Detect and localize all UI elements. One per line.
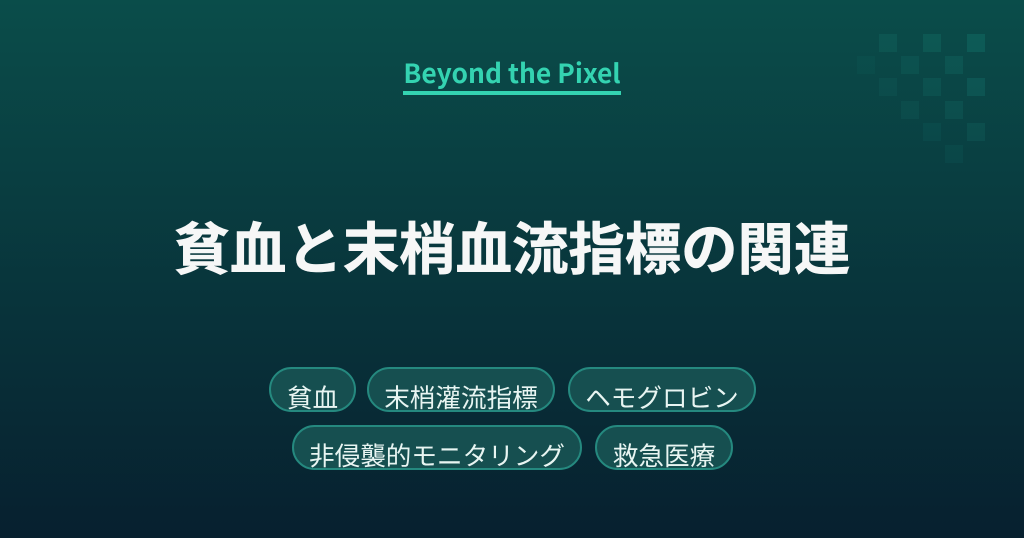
decorative pixel grid icon — [879, 34, 985, 141]
title: 貧血と末梢血流指標の関連 — [174, 205, 850, 286]
tag: peripheral perfusion index — [367, 367, 555, 412]
tag: hemoglobin — [568, 367, 756, 412]
tag: emergency medicine — [595, 425, 733, 470]
tag: anemia — [269, 367, 356, 412]
brand label: Beyond the Pixel — [403, 52, 621, 91]
tag: noninvasive monitoring — [292, 425, 582, 470]
brand underline — [403, 91, 621, 95]
